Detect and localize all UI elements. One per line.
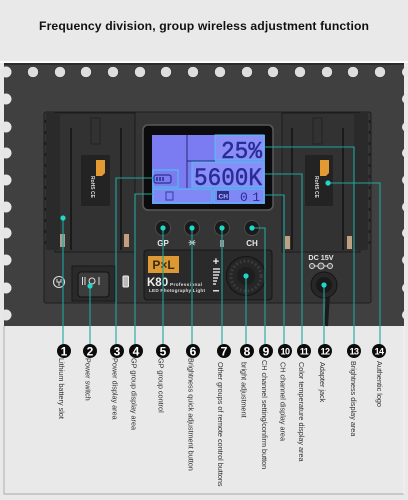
callout 10: CH channel display area: [278, 362, 288, 442]
callout 3: 3: [114, 344, 121, 358]
callout 2: 2: [87, 344, 94, 358]
logo: P×L: [152, 258, 175, 272]
power switch: [72, 266, 115, 301]
callout 3: Power display area: [110, 358, 120, 421]
callout 5: [156, 344, 170, 413]
callout 12: [318, 344, 332, 403]
brightness knob: [226, 256, 266, 296]
LCD display: [143, 125, 273, 210]
battery slot left: [46, 113, 135, 252]
callout 8: 8: [244, 344, 251, 358]
callout 6: Brightness quick adjustment button: [186, 358, 196, 471]
callout 4: [129, 344, 143, 431]
battery label right: [305, 155, 333, 206]
brand panel: LED Photography Light: [149, 288, 205, 293]
callout 1: Lithium battery slot: [57, 358, 66, 419]
callout 4: GP group display area: [130, 358, 138, 431]
callout 10: [278, 344, 292, 442]
callout 1: 1: [61, 344, 68, 358]
callout 11: Color temperature display area: [297, 362, 306, 463]
callout 12: 12: [321, 346, 330, 356]
callout 9: [259, 344, 273, 469]
ventilation holes: [28, 66, 386, 78]
brand panel: Professional: [170, 282, 202, 288]
battery slot right: [282, 113, 368, 252]
callout 14: Authentic logo: [375, 361, 384, 407]
control buttons: [156, 220, 260, 248]
icon: battery: [123, 276, 128, 287]
callout 9: CH channel setting/confirm button: [260, 360, 269, 469]
callout 1: [57, 344, 71, 419]
control buttons: ☀: [188, 238, 196, 248]
group icon: [166, 192, 173, 200]
callout 14: [372, 344, 386, 407]
CH reading: [217, 190, 260, 205]
callout dots: [60, 180, 331, 289]
callout 7: [216, 344, 231, 487]
callout 13: 13: [350, 346, 359, 356]
CH reading: 01: [240, 190, 260, 205]
callout 11: 11: [300, 346, 309, 356]
callout 6: 6: [190, 344, 197, 358]
colour temperature reading: 5600K: [194, 164, 262, 193]
brand panel: [144, 250, 272, 300]
control buttons: CH: [246, 239, 258, 248]
callout 2: Power switch: [84, 358, 92, 401]
edge notches: [0, 66, 408, 320]
callout 13: Brightness display area: [349, 361, 358, 437]
icon: plug: [54, 276, 64, 288]
callout 9: 9: [263, 344, 270, 358]
callout 4: 4: [133, 344, 140, 358]
callout 5: 5: [160, 344, 167, 358]
CH reading: CH: [218, 194, 228, 200]
callout 8: [240, 344, 254, 418]
callout 10: 10: [281, 346, 290, 356]
callout lines: [63, 147, 380, 344]
callout 7: 7: [221, 344, 228, 358]
callout 2: [83, 344, 97, 401]
DC input label: DC 15V: [308, 253, 334, 262]
panel: light back plate: [0, 61, 408, 326]
battery glyph: [154, 175, 171, 183]
callout 8: bright adjustment: [240, 362, 248, 418]
callout 14: 14: [375, 346, 384, 356]
title: Frequency division, group wireless adjustment function: [39, 19, 369, 33]
DC input label: [308, 253, 334, 269]
callout 6: [186, 344, 200, 471]
model name: K80: [147, 277, 168, 289]
battery label left: [81, 155, 110, 206]
battery label right: RoHS CE: [313, 176, 319, 199]
brightness scale: +: [213, 256, 219, 268]
callout 11: [297, 344, 311, 463]
panel: recessed control plate: [44, 112, 371, 303]
battery label left: RoHS CE: [89, 176, 95, 199]
control buttons: GP: [157, 239, 169, 248]
adapter jack and cable: [311, 272, 337, 326]
callout 13: [347, 344, 361, 437]
callout 7: Other groups of remote control buttons: [216, 362, 225, 487]
callout 12: Adapter jack: [318, 362, 327, 403]
callout 5: GP group control: [156, 358, 166, 413]
callout 3: [110, 344, 124, 421]
brightness reading: 25%: [221, 139, 263, 166]
